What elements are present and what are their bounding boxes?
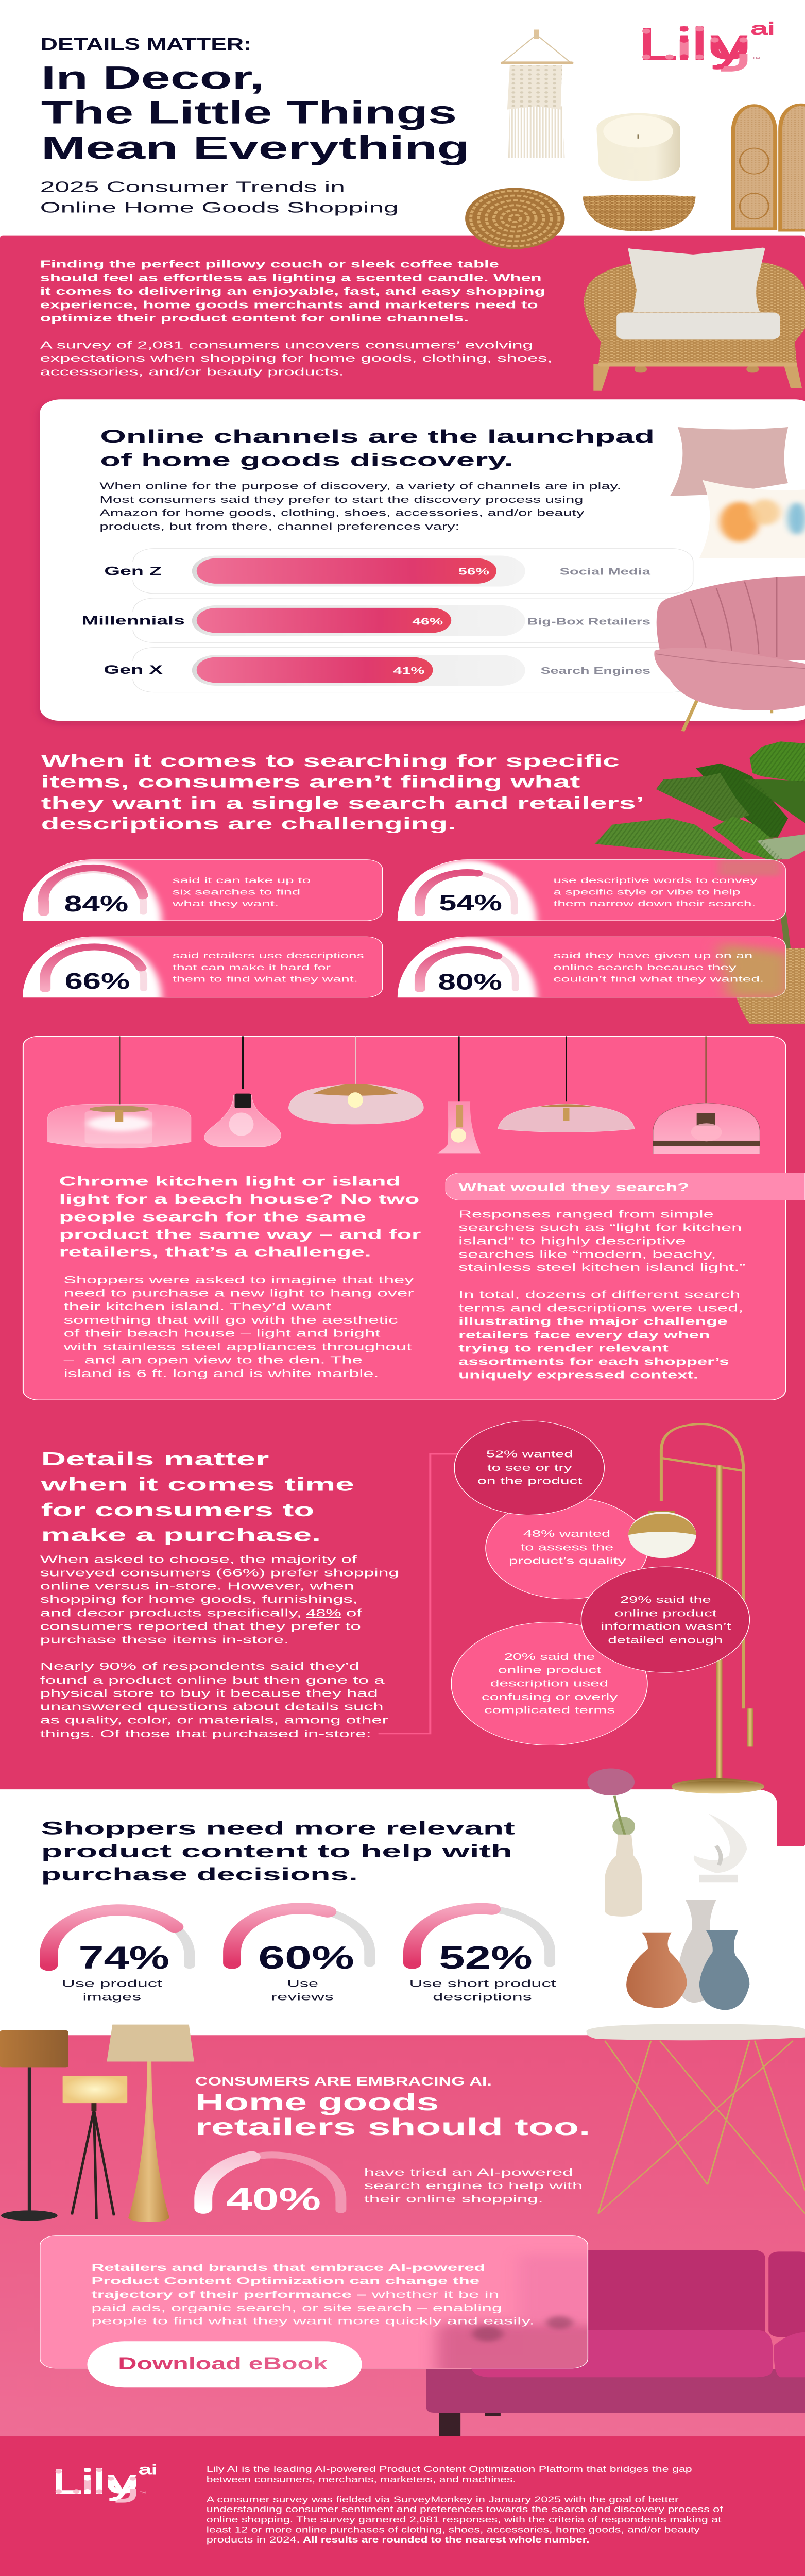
- stat card: 54%: 54%: [439, 890, 502, 916]
- bar row: Millennials: Millennials: [81, 614, 185, 628]
- heading: relevant content: product content to help with: [41, 1841, 512, 1861]
- icon: dried flower: [587, 1769, 635, 1836]
- text block: responses: [458, 1208, 745, 1381]
- panel: glass callout: [40, 2236, 611, 2387]
- text: bubble labels: information wasn’t: [601, 1621, 731, 1632]
- gauge: 52%: [409, 1909, 556, 2003]
- text block: purchase: things. Of those that purchased in-store:: [40, 1727, 371, 1739]
- icon: floor lamp 3: [63, 2076, 127, 2219]
- text: bubble labels: complicated terms: [484, 1705, 615, 1716]
- stat card: 54%: them narrow down their search.: [554, 899, 756, 908]
- icon: side table: [586, 2024, 805, 2214]
- text block: survey intro: [40, 339, 553, 378]
- heading: online channels: Online channels are the launchpad: [100, 427, 655, 447]
- text block: responses: assortments for each shopper’s: [458, 1356, 729, 1367]
- icon: floor lamp 1: [0, 2030, 68, 2221]
- stat card: 54%: a specific style or vibe to help: [554, 888, 740, 896]
- icon: floor lamp 2: [107, 2025, 194, 2222]
- heading: online channels: [100, 427, 655, 470]
- text block: intro bold: should feel as effortless as lighting a scented candle. When: [40, 272, 542, 283]
- text block: purchase: found a product online but then gone to a: [40, 1674, 385, 1686]
- text block: purchase: unanswered questions about details such: [40, 1701, 384, 1713]
- text block: scenario: island is 6 ft. long and is white marble.: [64, 1368, 379, 1379]
- subtitle: 2025 Consumer Trends in: [40, 179, 345, 195]
- text block: AI search: their online shopping.: [364, 2194, 543, 2205]
- stat card: 80%: online search because they: [554, 963, 737, 972]
- text: bubble labels: online product: [614, 1608, 717, 1619]
- text block: intro bold: Finding the perfect pillowy couch or sleek coffee table: [40, 258, 499, 270]
- text block: discovery: Amazon for home goods, clothing, shoes, accessories, and/or beauty: [99, 508, 584, 518]
- text block: scenario: of their beach house – light and bright: [64, 1328, 381, 1339]
- heading: relevant content: Shoppers need more relevant: [41, 1818, 515, 1839]
- icon: terracotta vase: [626, 1933, 687, 2008]
- icon: folding rattan screen: [733, 105, 805, 230]
- callout: what would they search: What would they search?: [458, 1181, 689, 1194]
- text block: survey intro: accessories, and/or beauty products.: [40, 366, 344, 378]
- heading: search: descriptions are challenging.: [41, 815, 456, 833]
- text block: discovery: products, but from there, channel preferences vary:: [99, 521, 459, 532]
- text block: retailers and brands: trajectory of their performance –: [91, 2289, 367, 2300]
- text: bubble labels: online product: [498, 1665, 602, 1675]
- text block: scenario: – and an open view to the den. The: [64, 1354, 363, 1366]
- icon: patterned pillow: [699, 480, 805, 558]
- gauge: 74%: 74%: [79, 1939, 169, 1975]
- text block: AI search: have tried an AI-powered: [364, 2167, 573, 2178]
- text: bubble labels: 52% wanted: [486, 1449, 573, 1460]
- bar row: Gen Z: Gen Z: [104, 564, 162, 578]
- heading: purchase: Details matter: [41, 1449, 269, 1469]
- heading: home goods retailers: Home goods: [195, 2089, 439, 2115]
- text block: purchase: surveyed consumers (66%) prefer shopping: [40, 1566, 399, 1579]
- text block: discovery: [99, 481, 621, 532]
- stat card: 66%: [23, 937, 383, 997]
- text block: discovery: When online for the purpose of discovery, a variety of channels are in play.: [99, 481, 621, 492]
- text: bubble labels: description used: [490, 1679, 608, 1689]
- heading: search: they want in a single search and retailers’: [41, 794, 644, 812]
- icon: macrame wall hanging: [501, 30, 573, 158]
- text: bubble labels: 48% wanted: [523, 1529, 610, 1539]
- stat card: 84%: [23, 859, 383, 921]
- heading: chrome kitchen light: light for a beach house? No two: [59, 1192, 419, 1207]
- gauge: 52%: descriptions: [433, 1992, 532, 2003]
- icon: lamp globe: [628, 1511, 696, 1558]
- heading: chrome kitchen light: product the same way – and for: [59, 1227, 421, 1242]
- logo: Lily AI: TM: [752, 56, 760, 60]
- stat card: 66%: them to find what they want.: [173, 975, 358, 984]
- text block: scenario: with stainless steel appliances throughout: [63, 1341, 412, 1352]
- panel: footer: [0, 2436, 805, 2576]
- stat card: 80%: [396, 937, 791, 1059]
- bubble: 29%: [581, 1567, 749, 1672]
- text block: scenario: [63, 1274, 414, 1379]
- icon: cream bottle vase: [605, 1835, 642, 1917]
- panel: pink background: [0, 236, 805, 1846]
- panel: header: [40, 18, 805, 231]
- gauge: 60%: Use: [287, 1978, 318, 1989]
- icon: basket: [583, 195, 696, 231]
- logo: Lily AI white: Lily: [52, 2462, 136, 2501]
- icon: palm plant: [594, 741, 805, 954]
- text block: intro bold: experience, home goods merchants and marketers need to: [40, 299, 538, 311]
- icon: pendant lamp 2: [204, 1036, 281, 1147]
- stat card: 84%: 84%: [64, 891, 128, 917]
- bar row: Gen X: Gen X: [104, 663, 163, 676]
- text block: responses: terms and descriptions were used,: [458, 1302, 743, 1314]
- icon: pendant lamp 6: [653, 1036, 760, 1154]
- text block: responses: searches like “modern, beachy,: [458, 1249, 716, 1260]
- text block: retailers and brands: [91, 2262, 535, 2327]
- subtitle: [40, 179, 399, 216]
- stat card: 66%: 66%: [65, 969, 130, 994]
- bar row: Gen X: Search Engines: [541, 666, 650, 676]
- text block: scenario: Shoppers were asked to imagine that they: [64, 1274, 414, 1285]
- stat card: 84%: six searches to find: [173, 888, 300, 896]
- text block: retailers and brands: whether it be in: [371, 2289, 499, 2300]
- text block: retailers and brands: Retailers and brands that embrace AI-powered: [91, 2262, 485, 2273]
- title: Mean Everything: [41, 130, 470, 166]
- icon: wicker armchair: [584, 248, 805, 391]
- panel: intro: [40, 248, 805, 391]
- text block: AI search: [364, 2167, 583, 2205]
- icon: rattan placemat: [465, 188, 564, 249]
- button: download ebook: [87, 2341, 362, 2387]
- text block: about: between consumers, merchants, marketers, and machines.: [207, 2475, 516, 2484]
- arrow: connector to bubbles: [379, 1454, 480, 1734]
- text block: purchase: shopping for home goods, furnishings,: [40, 1593, 358, 1605]
- gauge: 40%: 40%: [226, 2181, 321, 2217]
- stat card: 54%: use descriptive words to convey: [554, 876, 758, 885]
- subtitle: Online Home Goods Shopping: [40, 199, 399, 216]
- icon: blush armchair: [654, 576, 805, 731]
- stat card: 80%: couldn’t find what they wanted.: [554, 975, 764, 984]
- heading: consumers embracing: CONSUMERS ARE EMBRACING AI.: [195, 2074, 492, 2088]
- text block: purchase: consumers reported that they prefer to: [40, 1620, 361, 1632]
- stat card: 84%: said it can take up to: [173, 876, 311, 885]
- stat card: 66%: that can make it hard for: [173, 963, 331, 972]
- bubble: 20%: [451, 1622, 647, 1745]
- text block: purchase: as quality, color, or materials, among other: [40, 1714, 388, 1726]
- heading: online channels: of home goods discovery.: [100, 450, 513, 470]
- icon: lamp base top: [672, 1781, 764, 1793]
- heading: chrome kitchen light: people search for the same: [59, 1209, 366, 1224]
- heading: chrome kitchen light: Chrome kitchen light or island: [59, 1174, 401, 1189]
- panel: kitchen light: [23, 1036, 805, 1400]
- heading: search: [41, 752, 644, 833]
- text: bubble labels: 29% said the: [620, 1595, 711, 1605]
- text block: responses: In total, dozens of different search: [458, 1289, 740, 1300]
- stat card: 54%: [398, 859, 786, 921]
- text block: about: A consumer survey was fielded via SurveyMonkey in January 2025 with the goal of better: [207, 2495, 679, 2504]
- text block: about: least 12 or more online purchases of clothing, shoes, accessories, home goods, and/or beauty: [207, 2525, 700, 2534]
- gauge: 60%: 60%: [258, 1939, 354, 1975]
- text: bubble labels: on the product: [477, 1476, 583, 1486]
- icon: pink pillow: [670, 427, 788, 496]
- gauge: 74%: [49, 1910, 190, 2003]
- heading: purchase: for consumers to: [41, 1500, 314, 1520]
- logo: Lily AI white: TM: [140, 2492, 146, 2494]
- logo: Lily AI: Lily: [638, 19, 747, 69]
- bar row: Gen X: [104, 648, 693, 692]
- text block: intro bold: it comes to delivering an enjoyable, fast, and easy shopping: [40, 285, 545, 297]
- text block: about: online shopping. The survey garnered 2,081 responses, with the criteria of respondents making at: [207, 2515, 722, 2524]
- text: bubble labels: confusing or overly: [482, 1692, 618, 1702]
- text block: survey intro: expectations when shopping for home goods, clothing, shoes,: [40, 352, 553, 364]
- title: The Little Things: [41, 94, 457, 130]
- gauge: 74%: images: [82, 1992, 141, 2003]
- icon: pendant lamp 3: [288, 1036, 423, 1124]
- icon: floor lamp arch: [661, 1424, 764, 1794]
- bar row: Gen Z: [104, 549, 693, 594]
- icon: pendant lamp 5: [498, 1036, 635, 1132]
- text block: about: understanding consumer sentiment and preferences towards the search and discovery process of: [207, 2504, 724, 2514]
- text block: retailers and brands: paid ads, organic search, or site search – enabling: [91, 2303, 502, 2314]
- text block: responses: retailers face every day when: [458, 1329, 710, 1341]
- title: [41, 60, 470, 166]
- text block: purchase: of: [346, 1607, 362, 1619]
- heading: purchase: when it comes time: [40, 1474, 354, 1495]
- panel: details matter purchase: [40, 1421, 764, 1794]
- text block: scenario: something that will go with the aesthetic: [64, 1314, 398, 1326]
- text block: responses: illustrating the major challenge: [458, 1316, 727, 1327]
- heading: purchase: [40, 1449, 354, 1546]
- bar row: Gen X: 41%: [393, 665, 424, 676]
- panel: search challenges: [23, 741, 805, 1024]
- text block: purchase: purchase these items in-store.: [40, 1634, 289, 1646]
- gauge: 52%: Use short product: [409, 1978, 556, 1989]
- title: In Decor,: [41, 60, 264, 95]
- callout: what would they search: [446, 1173, 805, 1200]
- bar row: Millennials: 46%: [412, 616, 443, 627]
- text block: scenario: their kitchen island. They’d want: [64, 1301, 332, 1312]
- text block: responses: uniquely expressed context.: [458, 1369, 698, 1381]
- text block: intro bold: optimize their product content for online channels.: [40, 312, 469, 324]
- text block: AI search: search engine to help with: [364, 2181, 583, 2192]
- panel: shoppers need: [0, 1769, 777, 2039]
- bar row: Millennials: [81, 598, 693, 642]
- panel: online channels card: [40, 399, 805, 731]
- text: bubble labels: [477, 1449, 731, 1716]
- text block: about: [207, 2464, 724, 2545]
- icon: magenta sofa: [426, 2250, 805, 2436]
- gauge: 74%: Use product: [62, 1978, 162, 1989]
- gauge: 60%: reviews: [271, 1992, 334, 2003]
- heading: home goods retailers: [195, 2089, 590, 2141]
- text: bubble labels: 20% said the: [504, 1652, 595, 1662]
- stat card: 84%: what they want.: [172, 899, 279, 908]
- bar row: Millennials: Big-Box Retailers: [527, 617, 650, 627]
- text block: retailers and brands: people to find what they want more quickly and easily.: [91, 2316, 535, 2327]
- bubble: 52%: [454, 1421, 604, 1515]
- heading: relevant content: purchase decisions.: [41, 1865, 358, 1885]
- button: download ebook: Download eBook: [118, 2353, 328, 2374]
- stat card: 80%: said they have given up on an: [554, 952, 752, 960]
- icon: grey vase: [678, 1900, 718, 2003]
- logo: Lily AI: ai: [750, 18, 775, 38]
- text: bubble labels: detailed enough: [608, 1635, 723, 1646]
- text block: purchase: and decor products specifically,: [40, 1607, 302, 1619]
- icon: sculpture: [694, 1814, 747, 1882]
- text block: responses: searches such as “light for kitchen: [458, 1222, 742, 1233]
- panel: embracing AI: [0, 2024, 805, 2436]
- text block: purchase: When asked to choose, the majority of: [40, 1553, 357, 1565]
- bubble: 48%: [486, 1497, 648, 1599]
- heading: details matter: DETAILS MATTER:: [41, 35, 251, 54]
- icon: blue vase: [699, 1930, 749, 2010]
- bar row: Gen Z: 56%: [458, 566, 489, 577]
- text block: responses: Responses ranged from simple: [458, 1208, 714, 1220]
- text block: discovery: Most consumers said they prefer to start the discovery process using: [99, 495, 583, 505]
- gauge: 52%: 52%: [439, 1939, 533, 1975]
- text block: retailers and brands: Product Content Optimization can change the: [91, 2276, 479, 2286]
- text: bubble labels: to assess the: [521, 1542, 613, 1553]
- text: bubble labels: to see or try: [487, 1463, 572, 1473]
- text block: purchase: [40, 1553, 399, 1739]
- heading: chrome kitchen light: [59, 1174, 421, 1259]
- bar row: Gen Z: Social Media: [560, 567, 651, 577]
- gauge: 40%: [203, 2155, 341, 2217]
- text block: purchase: physical store to buy it because they had: [40, 1687, 378, 1699]
- text block: purchase: online versus in-store. However, when: [40, 1580, 354, 1592]
- icon: pendant lamp 4: [437, 1036, 481, 1153]
- heading: purchase: make a purchase.: [41, 1524, 321, 1546]
- stat card: 80%: 80%: [438, 970, 502, 994]
- logo: Lily AI white: ai: [139, 2463, 157, 2477]
- text block: scenario: need to purchase a new light to hang over: [64, 1287, 414, 1299]
- icon: pendant lamp 1: [48, 1036, 191, 1148]
- text block: responses: trying to render relevant: [458, 1342, 669, 1354]
- icon: candle: [596, 113, 680, 181]
- text block: responses: stainless steel kitchen island light.”: [458, 1262, 745, 1274]
- text block: survey intro: A survey of 2,081 consumers uncovers consumers’ evolving: [40, 339, 533, 351]
- icon: woven planter: [728, 948, 805, 1024]
- text block: responses: island” to highly descriptive: [458, 1235, 686, 1247]
- gauge: 60%: [232, 1908, 370, 2003]
- heading: home goods retailers: retailers should too.: [195, 2114, 590, 2141]
- text block: about: products in 2024.: [207, 2535, 300, 2545]
- text block: purchase: Nearly 90% of respondents said they’d: [40, 1660, 359, 1672]
- heading: search: When it comes to searching for specific: [41, 752, 620, 771]
- text: bubble labels: product’s quality: [509, 1556, 626, 1566]
- heading: chrome kitchen light: retailers, that’s a challenge.: [59, 1244, 371, 1259]
- text block: intro bold: [40, 258, 545, 324]
- text block: about: Lily AI is the leading AI-powered Product Content Optimization Platform that bridges the gap: [207, 2464, 692, 2474]
- text block: about: All results are rounded to the nearest whole number.: [303, 2535, 589, 2545]
- heading: search: items, consumers aren’t finding what: [41, 772, 580, 791]
- heading: relevant content: [41, 1818, 515, 1885]
- text block: purchase: 48%: [306, 1607, 341, 1619]
- stat card: 66%: said retailers use descriptions: [173, 952, 364, 960]
